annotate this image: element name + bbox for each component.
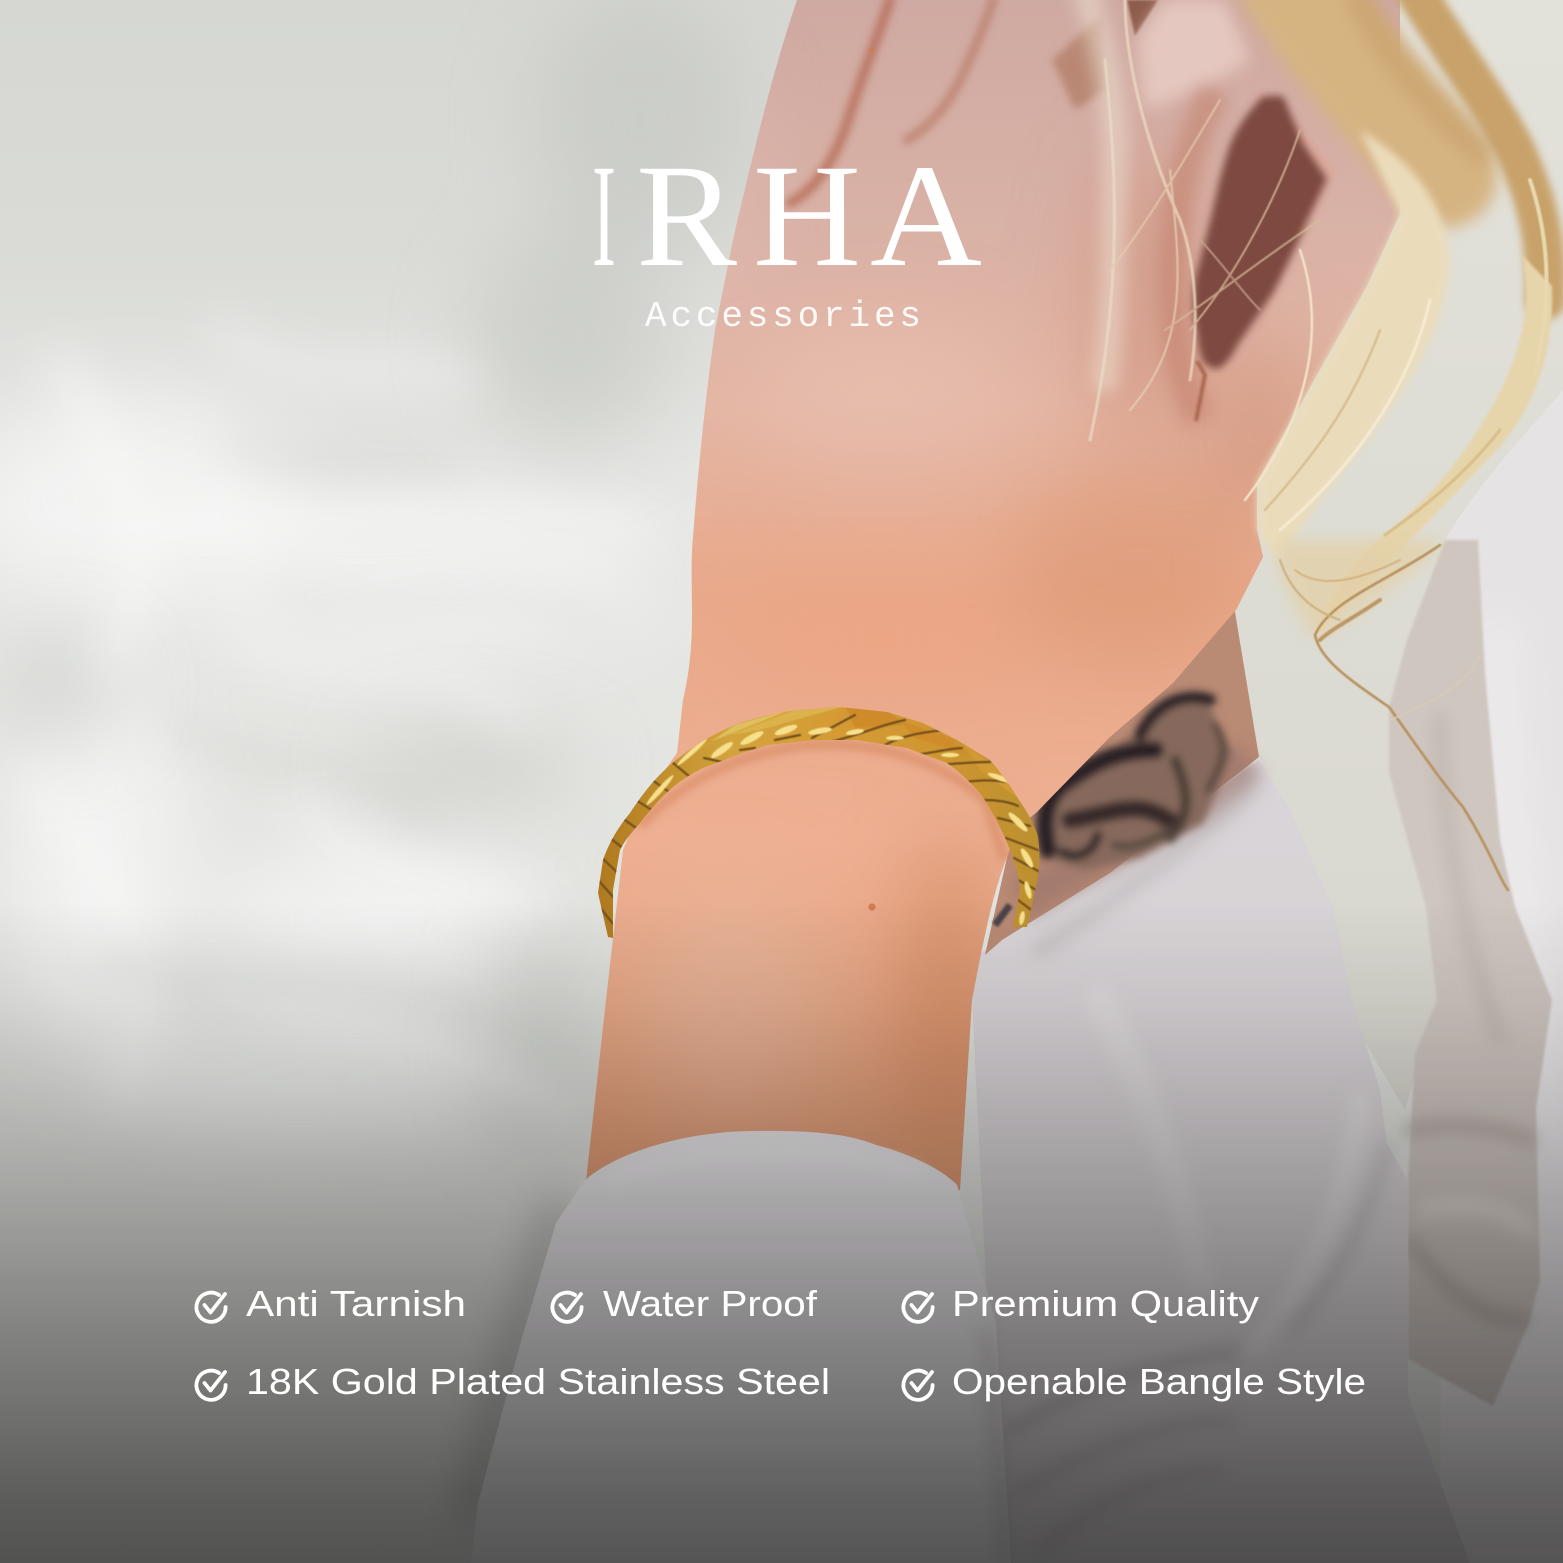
- finger creases: [790, 0, 993, 203]
- subtitle: Accessories: [645, 296, 921, 337]
- sleeve cuff: [471, 1131, 1011, 1563]
- title: brand name: R: [636, 134, 737, 297]
- finger patches near hair: [1050, 0, 1328, 170]
- golden top mass: [1290, 0, 1445, 175]
- sweater folds: [1010, 790, 1387, 1550]
- skin freckle marks: [868, 49, 876, 911]
- feature: anti tarnish: [196, 1283, 466, 1324]
- beige fold panel: [1389, 540, 1552, 1406]
- highlights: [645, 723, 1035, 925]
- bangle shadow: [640, 745, 1005, 860]
- feature: premium quality: Premium Quality: [952, 1283, 1259, 1324]
- thin strands: [1245, 180, 1546, 890]
- upper facets: [712, 707, 1018, 798]
- twist lines: [598, 715, 1040, 925]
- neck with tattoo: [985, 600, 1259, 955]
- blond hair: [1085, 0, 1552, 890]
- icon: check circle: [196, 1293, 226, 1322]
- feature: anti tarnish: Anti Tarnish: [246, 1283, 466, 1324]
- tattoo: [1036, 697, 1233, 870]
- hand and forearm: [560, 0, 1420, 1200]
- outer hair band: [1315, 255, 1552, 640]
- bottom dark gradient: [0, 900, 1563, 1563]
- cream backdrop behind hair: [1200, 0, 1563, 1110]
- bangle strands: [598, 706, 1040, 925]
- white shirt on the right: [1440, 390, 1563, 1563]
- title: brand name: [592, 134, 982, 297]
- feature list: [196, 1283, 1366, 1402]
- cavity glow: [1172, 90, 1215, 420]
- ear cavity shadow: [1193, 96, 1327, 421]
- gold twisted bangle: [598, 706, 1040, 938]
- main pale hair band: [1257, 130, 1450, 560]
- icon: check circle: [196, 1371, 226, 1400]
- title: brand name: I: [592, 134, 616, 297]
- title: brand name: A: [870, 134, 982, 297]
- lavender sweater body: [972, 760, 1470, 1563]
- feature: water proof: Water Proof: [603, 1283, 818, 1324]
- icon: check circle: [552, 1293, 582, 1322]
- dark streak beside sleeve: [470, 1200, 560, 1520]
- hair tail: [1277, 540, 1445, 640]
- feature: openable bangle style: Openable Bangle Style: [952, 1361, 1366, 1402]
- icon: check circle: [903, 1293, 933, 1322]
- bangle body: [598, 707, 1039, 938]
- hand shading: [648, 158, 1318, 1138]
- icon: check circle: [903, 1371, 933, 1400]
- pale translucent strands over knuckles: [1085, 0, 1320, 440]
- feature: gold plated stainless steel: 18K Gold Plated Stainless Steel: [246, 1361, 830, 1402]
- title: brand name: H: [753, 134, 861, 297]
